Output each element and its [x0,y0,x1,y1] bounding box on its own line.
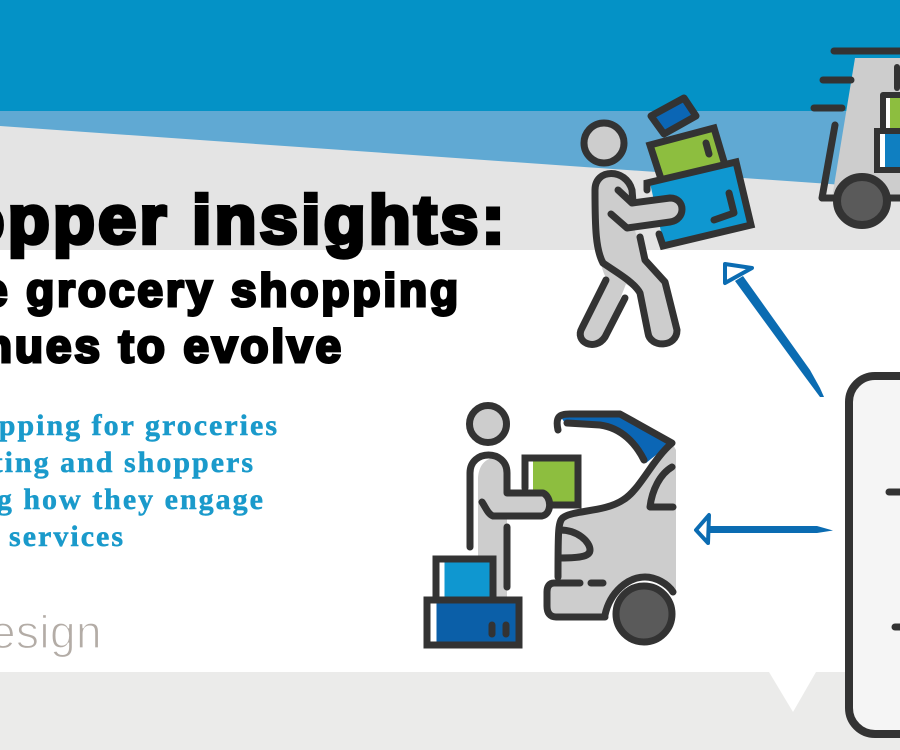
icon: large blue box [647,162,751,246]
background: light blue slanted band [0,111,900,190]
icon: dark blue box [427,600,519,645]
icon: delivery van, top right [814,51,900,225]
icon: light blue box [436,559,493,600]
icon: green box held [525,458,578,505]
subtitle [0,264,461,372]
arrow: to car [696,515,833,543]
icon: car body [547,414,676,617]
icon: person carrying boxes [580,98,751,344]
icon: person loading car [427,406,676,645]
background: grey header band [0,110,900,250]
icon: car wheel [616,586,672,642]
icon: person [470,406,550,598]
intro text [0,409,279,553]
arrow: to person carrying boxes [725,264,824,397]
icon: green box [650,128,725,182]
icon: person head [584,123,624,163]
background: dark blue top band [0,0,900,111]
icon: small dark box [651,98,696,134]
icon: person body and legs [580,174,682,344]
icon: smartphone [849,376,900,734]
background: bottom grey band with notch [0,672,900,750]
